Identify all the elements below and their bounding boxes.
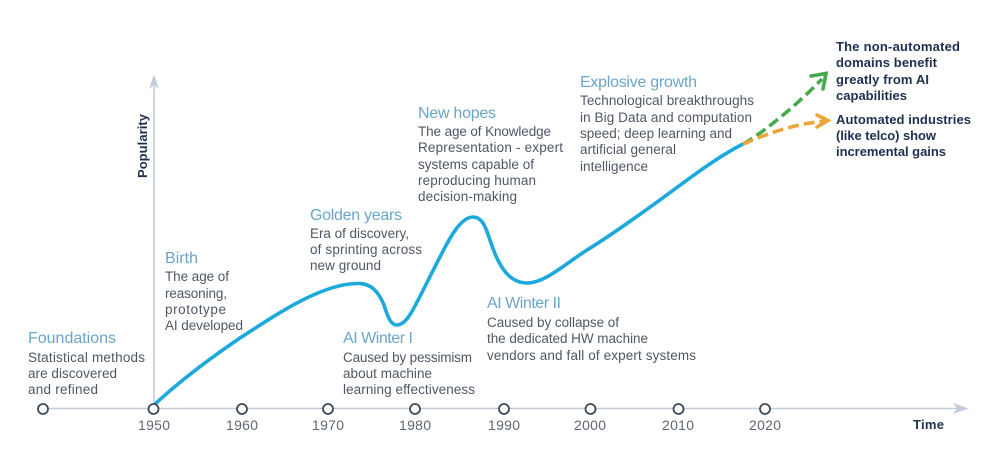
block: AI winter I: Caused by pessimism [343, 350, 472, 365]
block: birth: prototype [165, 302, 226, 317]
block: golden years: Golden years [310, 207, 402, 224]
block: AI winter I: learning effectiveness [343, 382, 475, 397]
block: new hopes: decision-making [418, 189, 517, 204]
block: AI winter I: about machine [343, 366, 432, 381]
year labels: 1990 [488, 417, 520, 433]
block: golden years: Era of discovery, [310, 226, 409, 241]
block: explosive growth: speed; deep learning and [580, 126, 732, 141]
block: explosive growth: Technological breakthroughs [580, 93, 754, 108]
year labels: 2010 [662, 417, 694, 433]
block: AI winter I [343, 330, 475, 397]
block: explosive growth: artificial general [580, 142, 676, 157]
year labels: 1960 [226, 417, 258, 433]
x axis arrow [43, 403, 969, 414]
block: foundations: Foundations [28, 330, 116, 347]
year labels [138, 417, 781, 433]
year labels: 1980 [399, 417, 431, 433]
popularity curve [154, 144, 743, 405]
year labels: 2020 [749, 417, 781, 433]
block: foundations: Statistical methods [28, 350, 145, 365]
block: foundations: and refined [28, 382, 98, 397]
arrow: non-automated domains [743, 74, 826, 144]
block: golden years [310, 207, 422, 273]
callout: automated industries: incremental gains [836, 144, 946, 159]
callout: automated industries [836, 112, 971, 159]
block: AI winter II: AI Winter II [487, 295, 561, 312]
callout: non-automated domains: greatly from AI [836, 72, 929, 87]
callout: automated industries: Automated industries [836, 112, 971, 127]
block: AI winter II: the dedicated HW machine [487, 331, 648, 346]
axis title: time: Time [913, 417, 944, 432]
year labels: 1970 [312, 417, 344, 433]
arrow: automated industries [743, 115, 828, 144]
block: foundations: are discovered [28, 366, 117, 381]
block: new hopes: reproducing human [418, 173, 536, 188]
block: AI winter II [487, 295, 696, 363]
callout: non-automated domains: capabilities [836, 88, 907, 103]
block: new hopes: Representation - expert [418, 140, 563, 155]
block: birth: AI developed [165, 318, 243, 333]
callout: automated industries: (like telco) show [836, 128, 937, 143]
timeline markers [38, 404, 770, 414]
block: explosive growth: in Big Data and computation [580, 110, 752, 125]
block: birth: Birth [165, 250, 198, 267]
block: birth: The age of [165, 269, 229, 284]
block: birth: reasoning, [165, 286, 227, 301]
block: golden years: of sprinting across [310, 242, 422, 257]
block: golden years: new ground [310, 258, 381, 273]
block: AI winter II: Caused by collapse of [487, 315, 619, 330]
block: explosive growth [580, 74, 754, 174]
y axis arrow [149, 74, 159, 408]
block: explosive growth: intelligence [580, 159, 648, 174]
year labels: 1950 [138, 417, 170, 433]
axis title: popularity: Popularity [135, 113, 150, 178]
block: AI winter II: vendors and fall of expert systems [487, 348, 696, 363]
callout: non-automated domains [836, 39, 960, 103]
block: new hopes [418, 105, 563, 204]
block: birth [165, 250, 243, 333]
block: AI winter I: AI Winter I [343, 330, 413, 347]
block: new hopes: New hopes [418, 105, 496, 122]
callout: non-automated domains: domains benefit [836, 55, 938, 70]
year labels: 2000 [574, 417, 606, 433]
block: explosive growth: Explosive growth [580, 74, 697, 91]
block: foundations [28, 330, 145, 397]
block: new hopes: systems capable of [418, 157, 534, 172]
callout: non-automated domains: The non-automated [836, 39, 960, 54]
block: new hopes: The age of Knowledge [418, 124, 551, 139]
